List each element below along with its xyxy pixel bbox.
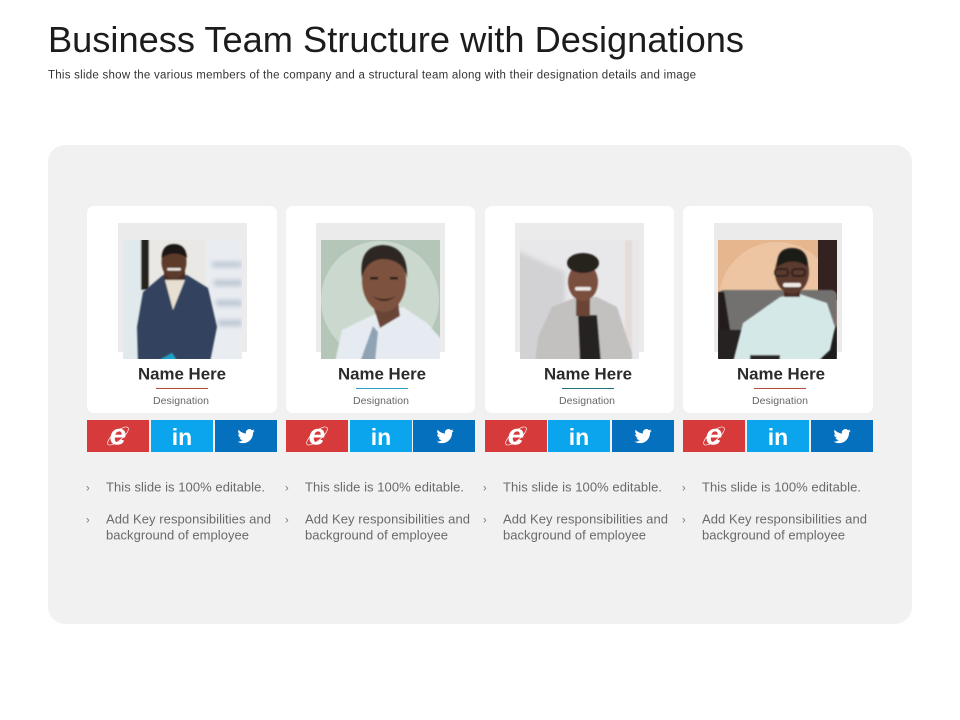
bullet list: This slide is 100% editable. — [702, 480, 861, 494]
name: Name Here — [737, 366, 825, 384]
icon: web — [683, 418, 745, 452]
bullet list: › — [682, 514, 686, 526]
photo backing — [316, 223, 445, 352]
bullet list: Add Key responsibilities and — [106, 512, 271, 526]
bullet list: › — [285, 482, 289, 494]
name: Name Here — [138, 366, 226, 384]
bullet list: Add Key responsibilities and — [503, 512, 668, 526]
bullet list — [682, 480, 867, 542]
name underline — [754, 388, 806, 389]
team member card 2 — [285, 206, 475, 542]
icon: twitter — [413, 420, 475, 452]
team member card 1 — [86, 206, 277, 542]
card body — [683, 206, 873, 413]
name underline — [156, 388, 208, 389]
icon: twitter — [612, 420, 674, 452]
panel: team background — [48, 145, 912, 624]
bullet list: This slide is 100% editable. — [503, 480, 662, 494]
name underline — [356, 388, 408, 389]
bullet list: › — [483, 514, 487, 526]
bullet list: › — [285, 514, 289, 526]
bullet list: background of employee — [106, 528, 249, 542]
bullet list: Add Key responsibilities and — [702, 512, 867, 526]
card body — [485, 206, 674, 413]
designation: Designation — [353, 395, 409, 407]
icon: web: e — [110, 418, 126, 452]
bullet list: This slide is 100% editable. — [106, 480, 265, 494]
photo: woman with glasses on sofa — [718, 240, 837, 362]
subtitle: This slide show the various members of the company and a structural team along with their designation details and image — [48, 70, 696, 82]
photo backing — [515, 223, 644, 352]
icon: linkedin — [548, 420, 610, 452]
bullet list: Add Key responsibilities and — [305, 512, 470, 526]
icon: web — [87, 418, 149, 452]
photo: woman in grey blazer — [515, 240, 639, 365]
bullet list: › — [682, 482, 686, 494]
bullet list: This slide is 100% editable. — [305, 480, 464, 494]
icon: web — [286, 418, 348, 452]
bullet list — [285, 480, 470, 542]
icon: twitter — [811, 420, 873, 452]
designation: Designation — [559, 395, 615, 407]
title: Business Team Structure with Designations — [48, 19, 744, 60]
photo backing — [714, 223, 842, 352]
name: Name Here — [544, 366, 632, 384]
icon: linkedin: in — [371, 424, 391, 450]
icon: linkedin: in — [569, 424, 589, 450]
bullet list — [483, 480, 668, 542]
photo: woman in white shirt and tie — [321, 240, 442, 362]
photo backing — [118, 223, 247, 352]
icon: linkedin: in — [768, 424, 788, 450]
bullet list: background of employee — [503, 528, 646, 542]
name underline — [562, 388, 614, 389]
bullet list: background of employee — [305, 528, 448, 542]
bullet list: background of employee — [702, 528, 845, 542]
bullet list: › — [86, 482, 90, 494]
icon: web: e — [309, 418, 325, 452]
team member card 4 — [682, 206, 873, 542]
team member card 3 — [483, 206, 674, 542]
icon: web: e — [508, 418, 524, 452]
icon: linkedin: in — [172, 424, 192, 450]
icon: web: e — [706, 418, 722, 452]
bullet list: › — [483, 482, 487, 494]
icon: twitter — [215, 420, 277, 452]
icon: linkedin — [151, 420, 213, 452]
icon: linkedin — [350, 420, 412, 452]
designation: Designation — [752, 395, 808, 407]
card body — [87, 206, 277, 413]
designation: Designation — [153, 395, 209, 407]
photo: man in navy cardigan — [123, 240, 242, 359]
icon: linkedin — [747, 420, 809, 452]
bullet list: › — [86, 514, 90, 526]
icon: web — [485, 418, 547, 452]
name: Name Here — [338, 366, 426, 384]
bullet list — [86, 480, 271, 542]
card body — [286, 206, 475, 413]
